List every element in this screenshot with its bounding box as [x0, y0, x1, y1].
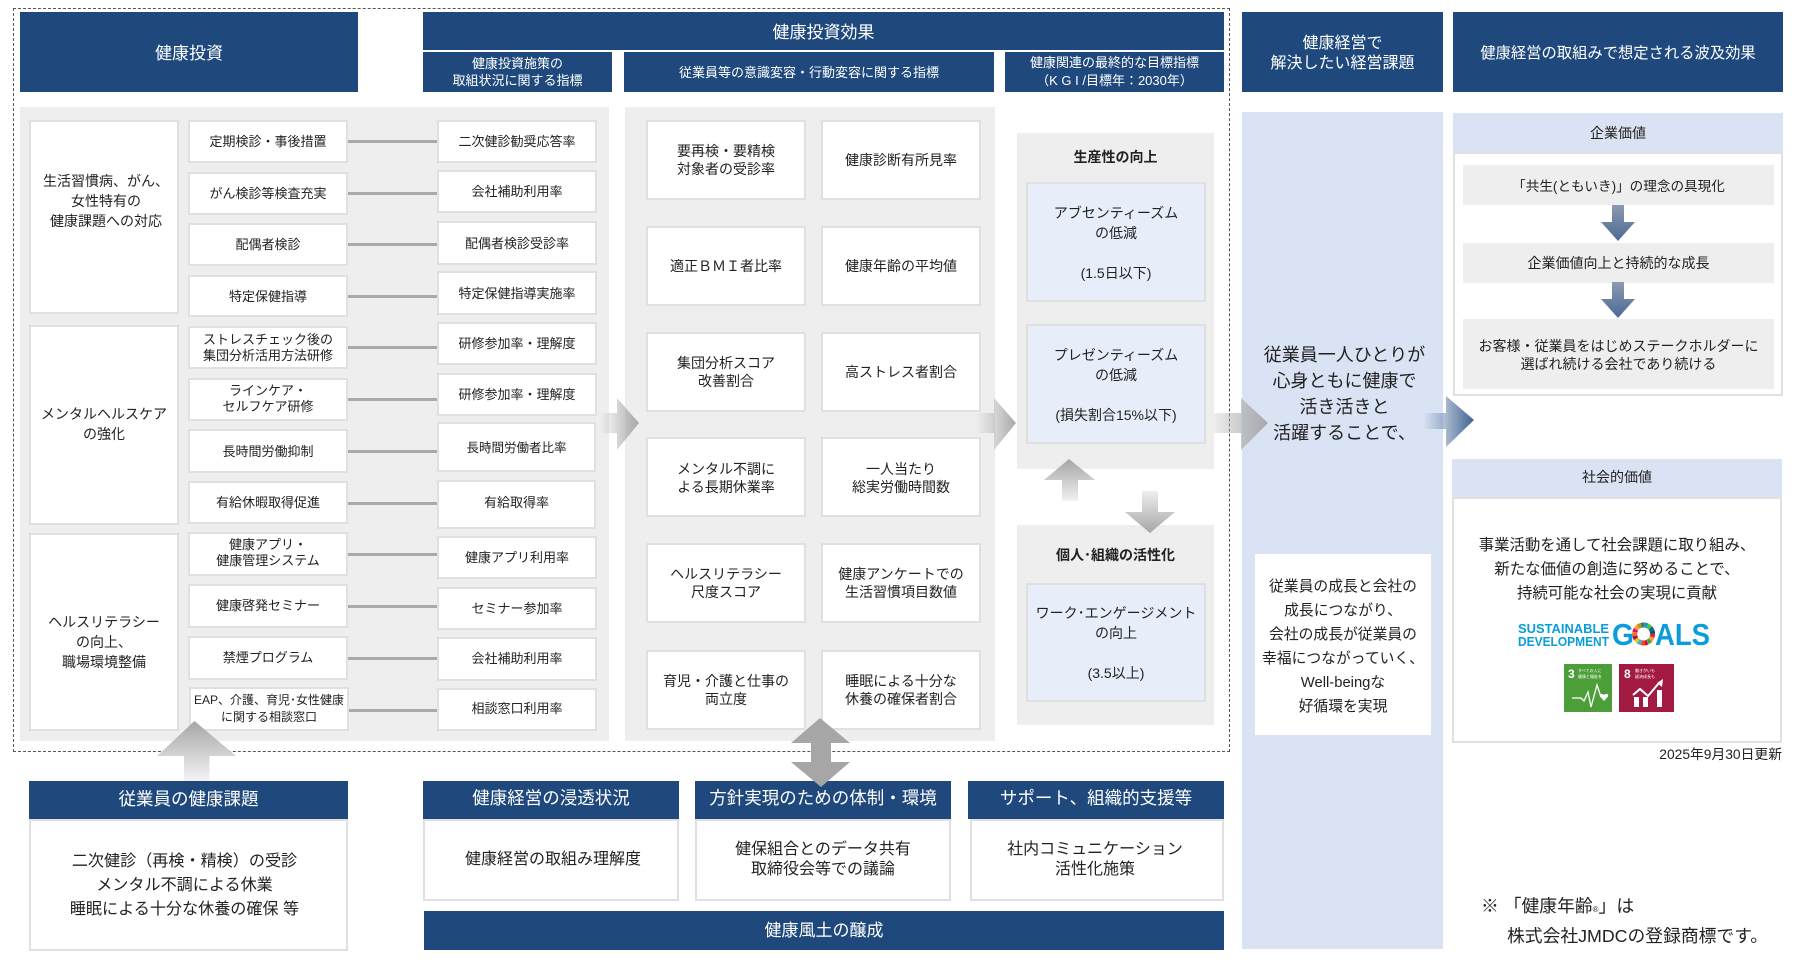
statement — [1479, 536, 1755, 602]
indicator: BMI: 適正ＢＭＩ者比率 — [670, 258, 782, 274]
measure 9: 健康アプリ・ — [229, 536, 307, 552]
sub heading: 取組状況に関する指標: 取組状況に関する指標 — [452, 73, 582, 88]
measure 3: 配偶者検診 — [235, 237, 300, 252]
metric 8: 有給取得率 — [484, 495, 549, 510]
panel: behavior change indicators — [625, 107, 995, 741]
measure 12: EAP、介護、育児･女性健康 — [194, 693, 344, 707]
measure 7 — [188, 429, 348, 473]
logo: sustainable development goals: SUSTAINABLE — [1518, 622, 1609, 636]
heading: 健康投資効果: 健康投資効果 — [772, 22, 874, 42]
theme: health literacy: の向上、 — [76, 634, 132, 650]
icon: SDG goal 8: 8 — [1624, 667, 1631, 681]
measure 5 — [188, 326, 348, 369]
title: 個人・組織の活性化: 個人･組織の活性化 — [1056, 547, 1175, 563]
step: ステークホルダー — [1463, 319, 1774, 389]
heading: 解決したい経営課題: 健康経営で — [1302, 35, 1382, 52]
connector lines — [348, 140, 437, 712]
theme: lifestyle diseases: 健康課題への対応 — [50, 213, 162, 229]
measure 9: 健康管理システム — [216, 552, 320, 568]
indicator: 集団分析: 集団分析スコア — [677, 355, 775, 371]
card body — [970, 819, 1224, 901]
body frame — [1453, 152, 1783, 396]
indicator: 受診率: 要再検・要精検 — [677, 143, 775, 159]
statement: 新たな価値の創造に努めることで、 — [1494, 561, 1740, 578]
indicator: 受診率 — [646, 120, 806, 200]
header: 社会的価値 — [1452, 459, 1782, 497]
indicator: 両立度 — [646, 650, 806, 730]
icon: SDG goal 8: 働きがいも — [1635, 667, 1655, 674]
metric 10 — [437, 587, 597, 630]
icon: SDG goal 8: 経済成長も — [1635, 673, 1655, 680]
indicator: 有所見率 — [821, 120, 981, 200]
sub heading: 取組状況に関する指標: 健康投資施策の — [472, 56, 563, 71]
metric 9 — [437, 536, 597, 579]
indicator: 長期休業率 — [646, 437, 806, 517]
theme: mental health: メンタルヘルスケア — [41, 406, 167, 422]
indicator: BMI — [646, 226, 806, 306]
callout: well-being cycle: 好循環を実現 — [1299, 699, 1387, 715]
indicator: 睡眠 — [821, 650, 981, 730]
panel: social value — [1452, 459, 1782, 743]
heading: 健康投資: 健康投資 — [155, 44, 223, 62]
trademark note: ※ 「健康年齢®」は — [1481, 896, 1634, 916]
theme: lifestyle diseases: 女性特有の — [71, 193, 141, 209]
dashed frame: health investment scope — [13, 8, 1230, 752]
heading: 健康投資効果 — [423, 12, 1224, 50]
card body: 健康経営の取組み理解度 — [465, 851, 641, 868]
KGI: absenteeism — [1026, 182, 1206, 302]
update date: 2025年9月30日更新 — [1659, 747, 1782, 762]
statement: 心身ともに健康で — [1272, 371, 1416, 391]
card: サポート、組織的支援等 — [968, 781, 1224, 901]
trademark note — [1481, 896, 1768, 946]
panel: productivity KGI — [1017, 133, 1214, 469]
card: 方針実現のための体制・環境 — [695, 781, 951, 901]
step: ステークホルダー: お客様・従業員をはじめステークホルダーに — [1478, 338, 1758, 354]
KGI: absenteeism: の低減 — [1095, 224, 1137, 240]
arrow: down 2 — [1601, 282, 1635, 318]
metric 3: 配偶者検診受診率 — [465, 236, 569, 250]
step: 共生の理念: 「共生(ともいき)」の理念の具現化 — [1512, 179, 1725, 194]
indicator: ヘルスリテラシー — [646, 543, 806, 623]
measure 8 — [188, 481, 348, 524]
indicator: 健康年齢 — [821, 226, 981, 306]
indicator: 生活習慣: 健康アンケートでの — [838, 566, 964, 582]
metric 2: 会社補助利用率 — [471, 184, 562, 199]
card body: 活性化施策 — [1055, 861, 1135, 878]
body frame — [1452, 497, 1782, 743]
metric 1 — [437, 120, 597, 163]
card header: 健康経営の浸透状況 — [472, 788, 630, 808]
metric 5: 研修参加率・理解度 — [458, 336, 576, 351]
statement: 活躍することで、 — [1273, 423, 1416, 443]
indicator: 健康年齢: 健康年齢の平均値 — [845, 258, 957, 274]
indicator: 生活習慣 — [821, 543, 981, 623]
indicator: 総実労働時間数: 総実労働時間数 — [852, 478, 950, 494]
callout: well-being cycle: 成長につながり、 — [1284, 603, 1402, 619]
measure 5: ストレスチェック後の — [203, 332, 333, 347]
indicator: 集団分析: 改善割合 — [698, 373, 754, 389]
KGI: work engagement — [1026, 583, 1206, 702]
statement: 活き活きと — [1300, 397, 1390, 417]
indicator: 有所見率: 健康診断有所見率 — [845, 152, 957, 168]
metric 11 — [437, 637, 597, 681]
callout: well-being cycle: Well-beingな — [1301, 675, 1385, 691]
measure 1 — [188, 120, 348, 163]
metric 1: 二次健診勧奨応答率 — [458, 134, 576, 149]
theme: health literacy — [29, 533, 179, 731]
measure 10: 健康啓発セミナー — [216, 598, 320, 612]
indicator: 長期休業率: メンタル不調に — [677, 460, 775, 476]
KGI: work engagement: の向上 — [1095, 624, 1137, 640]
measure 11 — [188, 636, 348, 680]
metric 6: 研修参加率・理解度 — [458, 387, 576, 402]
card body: 取締役会等での議論 — [751, 861, 895, 878]
card header — [29, 781, 348, 819]
measure 6 — [188, 378, 348, 421]
indicator: 両立度: 両立度 — [705, 691, 747, 707]
statement: 従業員一人ひとりが — [1264, 345, 1425, 365]
indicator: 集団分析 — [646, 332, 806, 412]
step: 企業価値向上 — [1463, 243, 1774, 283]
metric 12: 相談窓口利用率 — [471, 701, 562, 716]
step: 共生の理念 — [1463, 165, 1774, 205]
measure 8: 有給休暇取得促進 — [216, 495, 320, 510]
card header: 従業員の健康課題 — [118, 788, 258, 808]
sub heading: 取組状況に関する指標 — [423, 52, 612, 92]
title: 生産性の向上: 生産性の向上 — [1074, 149, 1158, 165]
metric 7: 長時間労働者比率 — [466, 440, 566, 454]
metric 6 — [437, 373, 597, 416]
KGI: absenteeism: アブセンティーズム — [1054, 204, 1178, 220]
step: 企業価値向上: 企業価値向上と持続的な成長 — [1528, 254, 1710, 270]
card body: 健保組合とのデータ共有 — [735, 841, 911, 858]
statement: 事業活動を通して社会課題に取り組み、 — [1479, 537, 1755, 554]
callout: well-being cycle: 会社の成長が従業員の — [1269, 627, 1417, 643]
arrow: productivity up from activation — [1044, 459, 1095, 501]
arrow: two-way between culture and outcomes — [791, 718, 850, 787]
theme: mental health — [29, 325, 179, 525]
card header — [423, 781, 679, 819]
metric 10: セミナー参加率 — [471, 601, 562, 616]
theme: health literacy: ヘルスリテラシー — [48, 614, 160, 630]
measure 4: 特定保健指導 — [229, 288, 307, 304]
metric 4 — [437, 271, 597, 315]
heading: 想定される波及効果 — [1453, 12, 1783, 92]
sub heading: 最終的な目標指標 — [1005, 52, 1224, 92]
indicator: ヘルスリテラシー: ヘルスリテラシー — [670, 566, 782, 582]
arrow: KGI to management issue — [1214, 398, 1268, 450]
measure 4 — [188, 275, 348, 317]
measure 5: 集団分析活用方法研修 — [203, 348, 333, 363]
indicator: 長期休業率: よる長期休業率 — [677, 478, 775, 494]
indicator: 睡眠: 休養の確保者割合 — [845, 691, 957, 707]
metric 2 — [437, 170, 597, 213]
heading: 解決したい経営課題: 解決したい経営課題 — [1270, 55, 1414, 72]
banner: 健康風土の醸成 — [424, 911, 1224, 950]
metric 3 — [437, 221, 597, 265]
metric 7 — [437, 422, 596, 472]
panel: corporate value — [1453, 113, 1783, 396]
icon: SDG goal 3: すべての人に — [1578, 668, 1602, 674]
indicator: 受診率: 対象者の受診率 — [677, 161, 775, 177]
theme: mental health: の強化 — [83, 426, 125, 442]
card header: サポート、組織的支援等 — [1000, 788, 1192, 808]
panel: management issue column — [1242, 112, 1443, 949]
card body: 社内コミュニケーション — [1007, 841, 1183, 858]
arrow: health issues up to investment — [157, 721, 236, 781]
indicator: 生活習慣: 生活習慣項目数値 — [845, 584, 957, 600]
card: 従業員の健康課題 — [29, 781, 348, 951]
KGI: presenteeism: プレゼンティーズム — [1054, 346, 1178, 362]
measure 3 — [188, 223, 348, 266]
callout: well-being cycle: 従業員の成長と会社の — [1269, 579, 1417, 595]
arrow: management issue to ripple effects — [1423, 396, 1474, 447]
card body: 睡眠による十分な休養の確保 等 — [70, 900, 299, 918]
arrow: productivity down to activation — [1125, 491, 1175, 533]
arrow: investment to behavior change — [604, 398, 639, 450]
indicator: 総実労働時間数 — [821, 437, 981, 517]
metric 5 — [437, 322, 597, 365]
icon: SDG goal 3 — [1564, 664, 1612, 712]
sub heading: 最終的な目標指標: 健康関連の最終的な目標指標 — [1030, 54, 1199, 70]
measure 6: セルフケア研修 — [222, 399, 314, 414]
logo: sustainable development goals — [1518, 622, 1710, 647]
heading: 想定される波及効果: 健康経営の取組みで想定される波及効果 — [1480, 45, 1756, 62]
measure 12: に関する相談窓口 — [221, 710, 317, 724]
icon: SDG goal 3: 健康と福祉を — [1578, 673, 1602, 680]
card body: メンタル不調による休業 — [96, 876, 273, 894]
icon: SDG goal 3: 3 — [1568, 667, 1575, 681]
indicator: 両立度: 育児・介護と仕事の — [663, 673, 789, 689]
callout: well-being cycle — [1255, 554, 1431, 735]
indicator: 睡眠: 睡眠による十分な — [845, 673, 957, 689]
metric 8 — [437, 480, 596, 529]
card: 健康経営の浸透状況 — [423, 781, 679, 901]
card body — [29, 819, 348, 951]
KGI: presenteeism: の低減 — [1095, 366, 1137, 382]
statement: 持続可能な社会の実現に貢献 — [1517, 585, 1717, 602]
sub heading: 意識変容・行動変容に関する指標: 従業員等の意識変容・行動変容に関する指標 — [679, 64, 939, 80]
icon: SDG goal 8 — [1619, 664, 1674, 712]
KGI: absenteeism: (1.5日以下) — [1081, 264, 1151, 280]
KGI: work engagement: ワーク･エンゲージメント — [1036, 604, 1196, 620]
banner: 健康風土の醸成: 健康風土の醸成 — [764, 921, 884, 940]
heading: 健康投資 — [20, 12, 358, 92]
indicator: 高ストレス: 高ストレス者割合 — [845, 364, 957, 380]
measure 2: がん検診等検査充実 — [209, 186, 326, 201]
statement — [1264, 345, 1425, 443]
theme: health literacy: 職場環境整備 — [62, 654, 146, 670]
indicator: ヘルスリテラシー: 尺度スコア — [691, 584, 761, 600]
sub heading: 最終的な目標指標: （K G I /目標年：2030年） — [1036, 73, 1193, 88]
header: 社会的価値: 社会的価値 — [1582, 468, 1652, 484]
measure 11: 禁煙プログラム — [223, 650, 313, 664]
KGI: presenteeism — [1026, 324, 1206, 444]
theme: lifestyle diseases — [29, 120, 179, 314]
panel: health investment measures — [20, 107, 609, 741]
measure 2 — [188, 172, 348, 215]
callout: well-being cycle: 幸福につながっていく、 — [1262, 651, 1424, 667]
measure 7: 長時間労働抑制 — [222, 444, 314, 458]
card body: 二次健診（再検・精検）の受診 — [72, 852, 297, 870]
heading: 解決したい経営課題 — [1242, 12, 1443, 92]
header: 企業価値 — [1453, 113, 1783, 152]
metric 4: 特定保健指導実施率 — [458, 286, 576, 300]
header: 企業価値: 企業価値 — [1590, 124, 1646, 140]
metric 11: 会社補助利用率 — [471, 650, 562, 666]
panel: engagement KGI — [1017, 525, 1214, 725]
arrow: down 1 — [1601, 205, 1635, 241]
measure 9 — [188, 532, 348, 576]
indicator: 高ストレス — [821, 332, 981, 412]
sub heading: 意識変容・行動変容に関する指標 — [624, 52, 994, 92]
arrow: behavior change to KGI — [981, 398, 1016, 450]
card header: 方針実現のための体制・環境 — [709, 788, 937, 808]
card body — [695, 819, 951, 901]
card header — [695, 781, 951, 819]
KGI: work engagement: (3.5以上) — [1088, 664, 1144, 680]
measure 10 — [188, 584, 348, 628]
measure 12 — [189, 687, 349, 731]
card body — [423, 819, 679, 901]
trademark note: 株式会社JMDCの登録商標です。 — [1507, 926, 1768, 946]
measure 1: 定期検診・事後措置 — [209, 134, 326, 149]
measure 6: ラインケア・ — [229, 383, 307, 398]
theme: lifestyle diseases: 生活習慣病、がん、 — [43, 173, 169, 189]
metric 12 — [437, 688, 597, 731]
indicator: 総実労働時間数: 一人当たり — [866, 460, 936, 476]
card header — [968, 781, 1224, 819]
step: ステークホルダー: 選ばれ続ける会社であり続ける — [1521, 356, 1716, 372]
metric 9: 健康アプリ利用率 — [465, 550, 569, 565]
KGI: presenteeism: (損失割合15%以下) — [1055, 406, 1177, 422]
